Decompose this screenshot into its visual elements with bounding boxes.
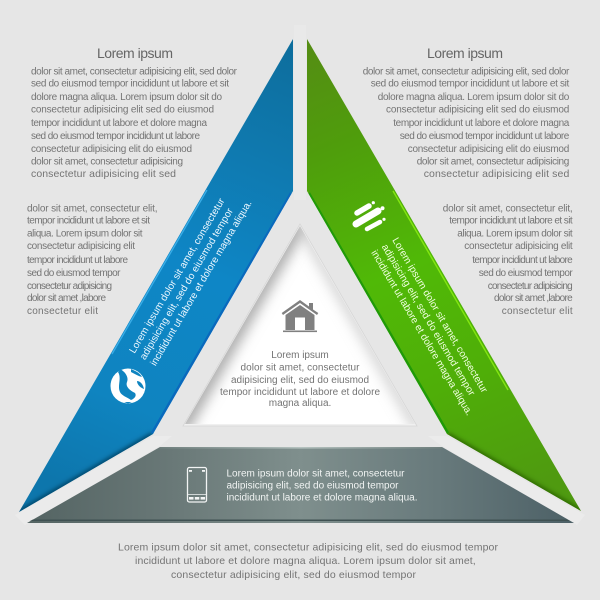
icon: people: [356, 201, 386, 229]
triangle caption: tempor incididunt ut labore et dolore: [220, 387, 380, 398]
text block: middle right: consectetur elit: [502, 306, 573, 317]
band shape: [27, 447, 574, 523]
text block: upper right: consectetur adipisicing elit sed: [424, 168, 569, 180]
text block: middle left: consectetur adipisicing elit: [27, 241, 135, 252]
band caption: Lorem ipsum dolor sit amet, consectetur: [226, 468, 405, 480]
icon: globe: [110, 368, 146, 404]
text block: upper left: dolor sit amet, consectetur adipisicing: [31, 156, 183, 168]
heading: left: Lorem ipsum: [97, 45, 173, 61]
icon: smartphone: [188, 468, 206, 502]
ribbon caption: incididunt ut labore et dolore magna aliqua.: [149, 199, 255, 368]
triangle caption: adipisicing elit, sed do eiusmod: [231, 375, 369, 386]
heading: right: Lorem ipsum: [427, 45, 503, 61]
ribbon shading: [307, 60, 581, 512]
ribbon shape: [19, 39, 293, 512]
band caption: incididunt ut labore et dolore magna aliqua.: [226, 492, 418, 504]
ribbon caption: adipisicing elit, sed do eiusmod tempor: [379, 242, 477, 399]
text block: upper right: sed do eiusmod tempor incididunt ut labore: [400, 131, 570, 142]
band bottom edge: [30, 520, 570, 521]
text block: middle right: dolor sit amet ,labore: [494, 293, 573, 304]
text block: middle left: dolor sit amet, consectetur elit,: [27, 204, 158, 214]
panel: green ribbon: [307, 39, 581, 512]
text block: upper right: [363, 66, 570, 180]
text block: upper left: dolor sit amet, consectetur adipisicing elit, sed dolor: [31, 66, 238, 78]
text block: middle left: tempor incididunt ut labore: [27, 255, 128, 266]
text block: upper left: sed do eiusmod tempor incididunt ut labore: [31, 131, 200, 142]
ribbon shape: [307, 39, 581, 511]
ribbon caption: incididunt ut labore et dolore magna aliqua.: [368, 248, 474, 418]
text block: middle right: consectetur adipisicing: [488, 281, 573, 292]
text block: upper left: consectetur adipisicing elit sed: [31, 168, 176, 180]
panel: centre triangle: [180, 220, 420, 430]
text block: upper left: tempor incididunt ut labore et dolore magna: [31, 118, 207, 129]
text block: middle right: tempor incididunt ut labore et sit: [449, 216, 573, 226]
text block: middle right: [443, 204, 573, 317]
triangle caption: Lorem ipsum: [271, 350, 329, 361]
band top highlight: [160, 447, 442, 449]
triangle caption: [220, 350, 380, 409]
text block: middle right: sed do eiusmod tempor: [479, 268, 573, 279]
text block: bottom: incididunt ut labore et dolore magna aliqua. Lorem ipsum dolor sit amet,: [135, 555, 476, 567]
text block: upper right: consectetur adipisicing elit do eiusmod: [408, 144, 569, 155]
text block: upper left: sed do eiusmod tempor incididunt ut labore et sit: [31, 78, 229, 90]
text block: bottom: consectetur adipisicing elit, sed do eiusmod tempor: [171, 569, 416, 581]
text block: upper right: dolor sit amet, consectetur adipisicing: [417, 156, 569, 168]
text block: bottom: [118, 542, 498, 581]
triangle caption: magna aliqua.: [269, 398, 331, 409]
text block: middle left: dolor sit amet ,labore: [27, 293, 106, 304]
text block: upper left: [31, 66, 238, 180]
text block: middle right: consectetur adipisicing elit: [464, 241, 573, 252]
band caption: [226, 468, 418, 504]
text block: upper right: consectetur adipisicing elit sed do eiusmod: [386, 104, 569, 116]
ribbon caption: adipisicing elit, sed do eiusmod tempor: [138, 206, 236, 362]
text block: middle left: tempor incididunt ut labore et sit: [27, 216, 150, 226]
text block: middle right: tempor incididunt ut labore: [472, 255, 573, 266]
text block: upper right: dolor sit amet, consectetur adipisicing elit, sed dolor: [363, 66, 570, 78]
text block: bottom: Lorem ipsum dolor sit amet, consectetur adipisicing elit, sed do eiusmod tempor: [118, 542, 498, 554]
text block: middle left: [27, 204, 158, 317]
band caption: adipisicing elit, sed do eiusmod tempor: [226, 480, 399, 492]
text block: upper right: tempor incididunt ut labore et dolore magna: [393, 118, 570, 129]
panel: gray band: [27, 447, 574, 523]
text block: middle left: consectetur elit: [27, 306, 98, 317]
ribbon caption: Lorem ipsum dolor sit amet, consectetur: [128, 196, 228, 356]
light gaps between panels: [15, 25, 585, 525]
triangle fill with inner shadow: [180, 220, 420, 430]
text block: middle left: consectetur adipisicing: [27, 281, 112, 292]
text block: upper right: sed do eiusmod tempor incididunt ut labore et sit: [371, 78, 570, 90]
triangle caption: dolor sit amet, consectetur: [240, 362, 360, 374]
text block: upper left: consectetur adipisicing elit sed do eiusmod: [31, 104, 214, 116]
text block: middle right: aliqua. Lorem ipsum dolor sit: [457, 228, 573, 240]
text block: middle left: aliqua. Lorem ipsum dolor sit: [27, 228, 143, 240]
text block: upper left: consectetur adipisicing elit do eiusmod: [31, 144, 192, 155]
text block: upper right: dolore magna aliqua. Lorem ipsum dolor sit do: [378, 92, 570, 103]
panel: blue ribbon: [19, 39, 293, 513]
icon: house: [282, 300, 318, 332]
text block: middle right: dolor sit amet, consectetur elit,: [443, 204, 573, 214]
ribbon shading: [19, 60, 293, 513]
text block: upper left: dolore magna aliqua. Lorem ipsum dolor sit do: [31, 92, 222, 103]
ribbon caption: Lorem ipsum dolor sit amet, consectetur: [389, 236, 490, 395]
text block: middle left: sed do eiusmod tempor: [27, 268, 121, 279]
triangle rim: [183, 224, 417, 426]
